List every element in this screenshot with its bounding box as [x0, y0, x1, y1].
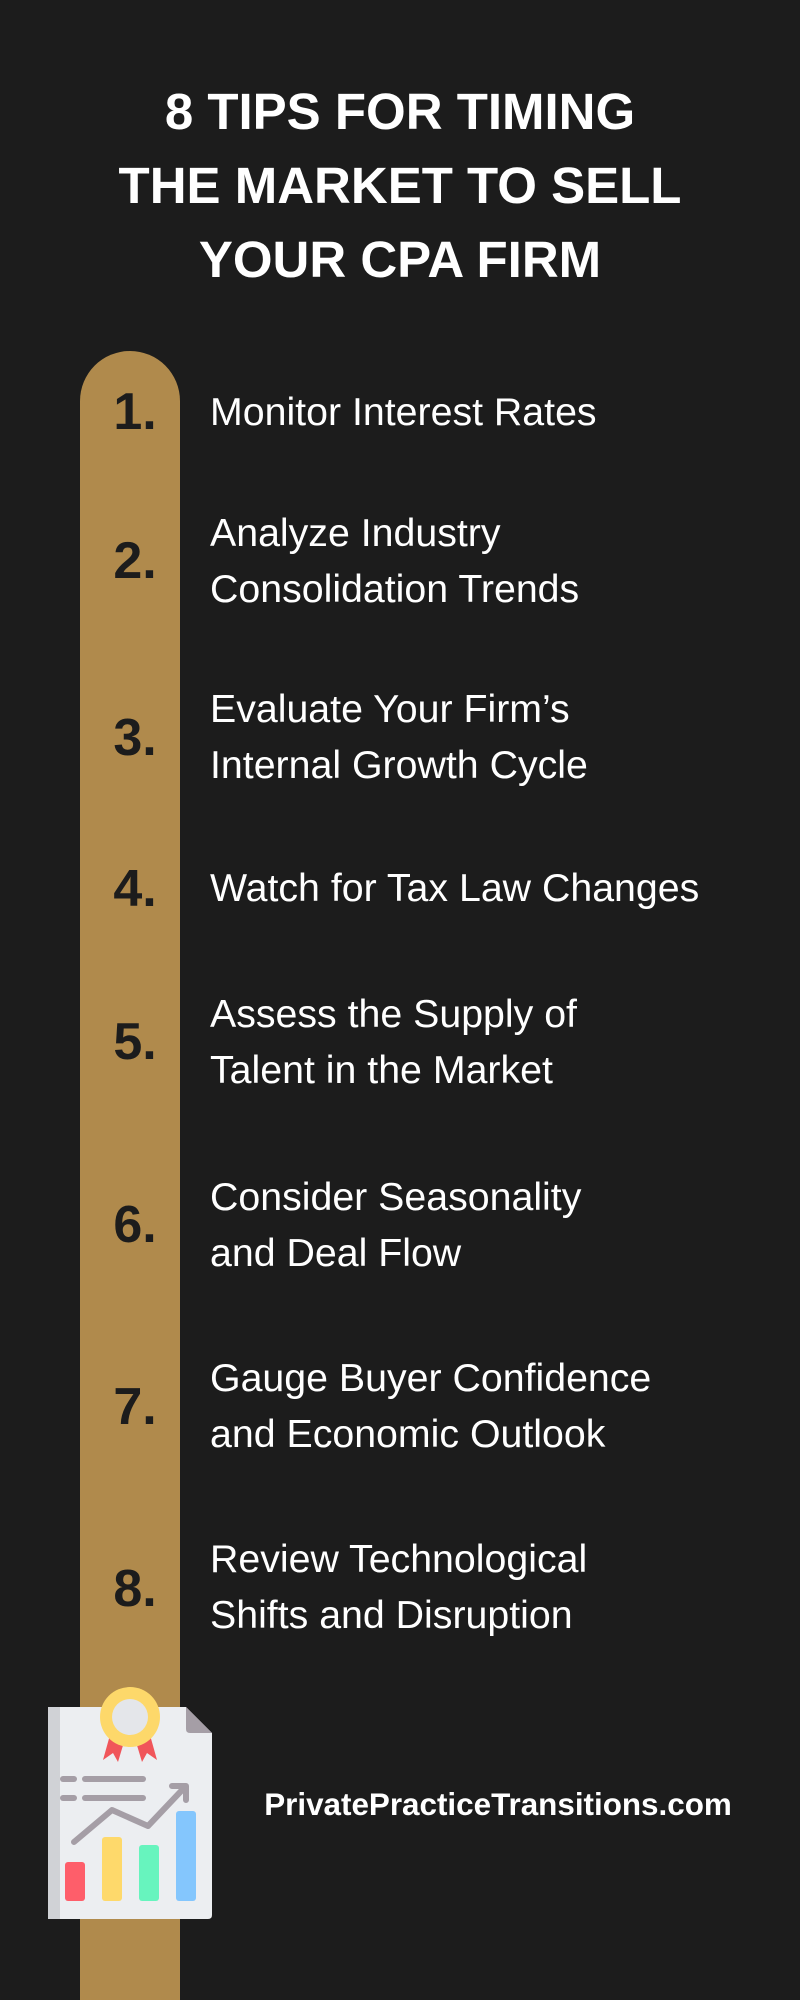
website: PrivatePracticeTransitions.com [264, 1787, 732, 1822]
tip 8: Shifts and Disruption [210, 1593, 573, 1637]
tip 6: Consider Seasonality [210, 1175, 581, 1219]
number 4: 4. [113, 860, 157, 918]
tip 3: Internal Growth Cycle [210, 743, 588, 787]
icon: report with chart [48, 1687, 212, 1919]
number 3: 3. [113, 709, 157, 767]
number 2: 2. [113, 532, 157, 590]
number 6: 6. [113, 1196, 157, 1254]
tip 6 [210, 1175, 582, 1275]
number 5: 5. [113, 1013, 157, 1071]
tip 1: Monitor Interest Rates [210, 390, 597, 434]
title: YOUR CPA FIRM [199, 231, 601, 288]
number 8: 8. [113, 1560, 157, 1618]
tip 5: Talent in the Market [210, 1048, 553, 1092]
tip 7 [210, 1356, 651, 1456]
tip 6: and Deal Flow [210, 1231, 461, 1275]
tip 4: Watch for Tax Law Changes [210, 866, 699, 910]
tip 8: Review Technological [210, 1537, 587, 1581]
tip 2: Analyze Industry [210, 511, 501, 555]
tip 5 [210, 992, 577, 1092]
title: THE MARKET TO SELL [119, 157, 681, 214]
tip 2: Consolidation Trends [210, 567, 579, 611]
timeline bar [80, 351, 180, 2000]
title [119, 83, 681, 288]
number 7: 7. [113, 1378, 157, 1436]
tip 3: Evaluate Your Firm’s [210, 687, 570, 731]
number 1: 1. [113, 383, 157, 441]
tip 2 [210, 511, 579, 611]
tip 3 [210, 687, 588, 787]
tip 7: Gauge Buyer Confidence [210, 1356, 651, 1400]
tip 5: Assess the Supply of [210, 992, 577, 1036]
tip 7: and Economic Outlook [210, 1412, 605, 1456]
title: 8 TIPS FOR TIMING [165, 83, 635, 140]
tip 8 [210, 1537, 587, 1637]
